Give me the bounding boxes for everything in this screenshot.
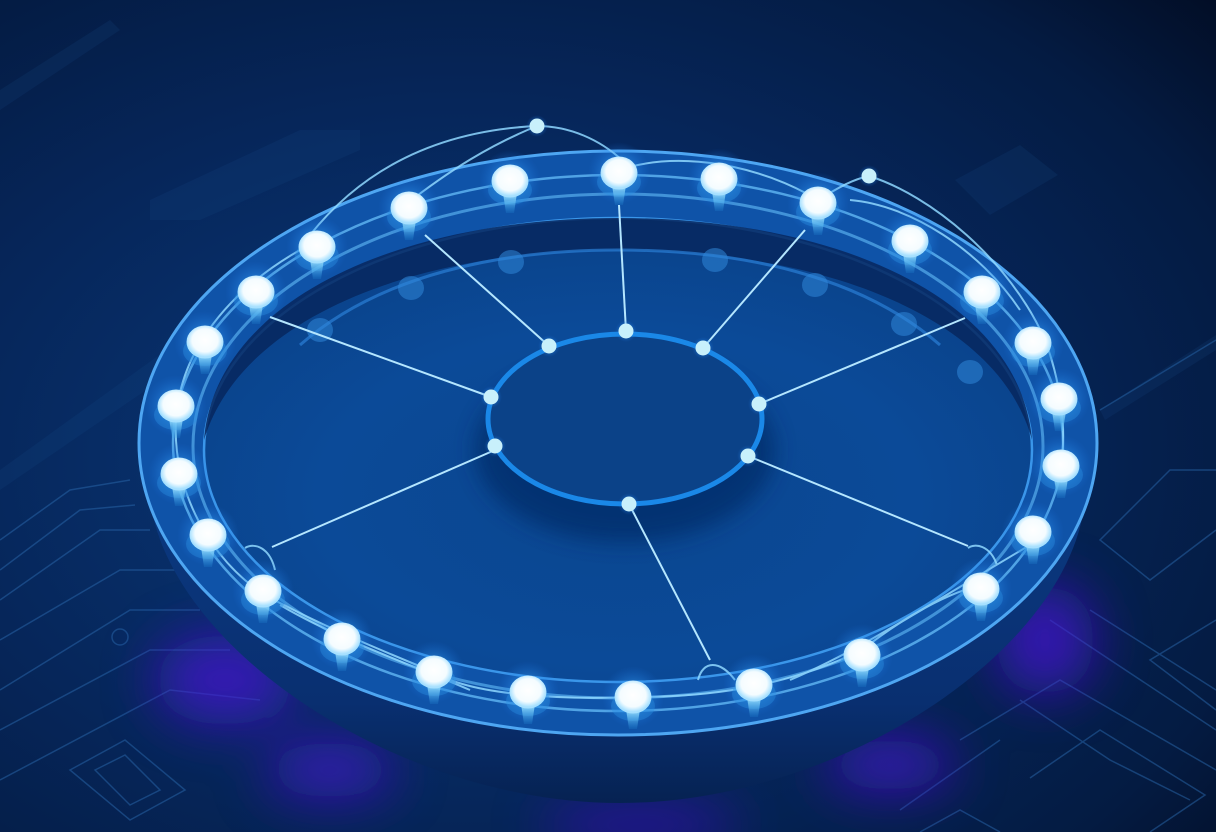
inner disc shadow at top xyxy=(204,218,1032,440)
spokes xyxy=(270,205,968,660)
purple under-glow xyxy=(155,585,1095,832)
hub nodes xyxy=(480,320,770,515)
overhead wires xyxy=(176,126,1063,698)
reflected LEDs in disc xyxy=(307,248,983,384)
hub shadow xyxy=(475,358,775,542)
inner disc xyxy=(204,218,1032,682)
inner ledge reflection xyxy=(300,250,940,345)
circuit traces xyxy=(0,340,1216,832)
LEDs xyxy=(145,142,1092,729)
platform base xyxy=(150,470,1085,803)
overhead wire nodes xyxy=(526,115,880,187)
outer translucent ring xyxy=(139,151,1097,735)
faint board blocks xyxy=(0,20,1216,490)
ring highlight lines xyxy=(173,175,1063,711)
hub disc xyxy=(488,334,762,504)
